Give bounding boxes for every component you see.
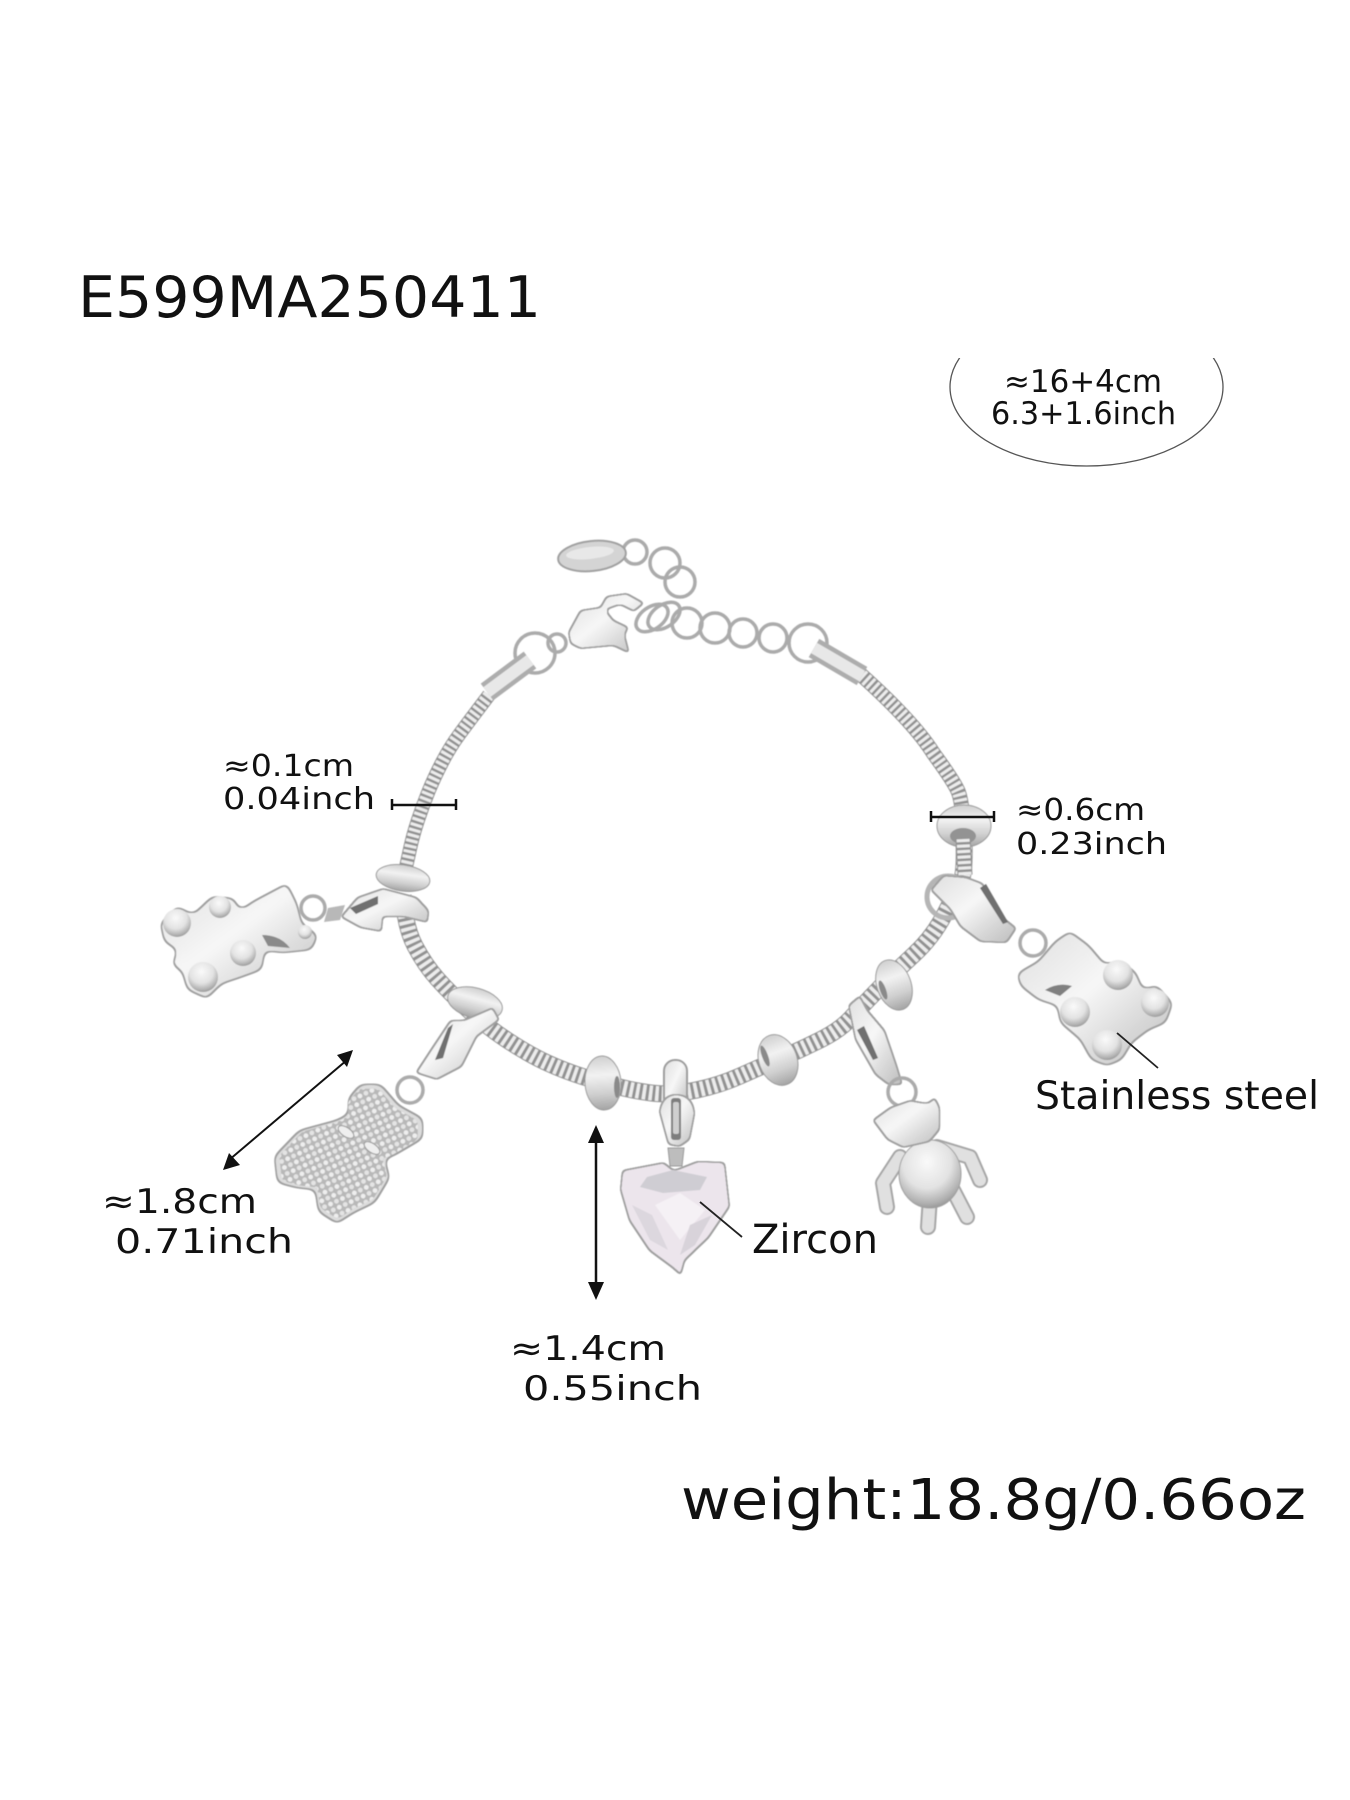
heart size inch: 0.55inch: [523, 1369, 702, 1409]
heart stone: [620, 1161, 730, 1276]
charm: pave zircon bear: [274, 1084, 423, 1224]
charm: left gummy bear: [160, 883, 325, 999]
heart bail: [664, 1060, 687, 1110]
spacer bead: lower right: [869, 955, 919, 1015]
bear size cm: ≈1.8cm: [102, 1182, 257, 1222]
stainless steel leader line: [1117, 1033, 1158, 1068]
teddy torso: [899, 1140, 961, 1208]
extender chain links: [515, 540, 827, 673]
bear charm size measure: [102, 1050, 353, 1262]
title: product code: E599MA250411: [78, 265, 541, 331]
bead width cm: ≈0.6cm: [1016, 793, 1145, 828]
chain thickness inch: 0.04inch: [223, 782, 375, 817]
weight text: weight:18.8g/0.66oz: [681, 1468, 1306, 1533]
bear size inch: 0.71inch: [115, 1222, 293, 1262]
clasp of left gummy bear: [324, 888, 429, 932]
chain thickness bar: [392, 799, 456, 810]
zircon leader line: [700, 1202, 742, 1237]
teddy head: [872, 1097, 940, 1148]
bracelet length callout: [949, 358, 1224, 467]
heart size cm: ≈1.4cm: [510, 1329, 666, 1369]
end tubes of the chain: [487, 648, 862, 692]
bear jump ring: [301, 896, 325, 920]
bead width measure: [931, 793, 1167, 862]
length in inches: 6.3+1.6inch: [991, 396, 1176, 432]
charm: zircon heart: [620, 1060, 730, 1276]
length in cm: ≈16+4cm: [1004, 364, 1162, 400]
spacer bead: bottom centre: [583, 1055, 623, 1111]
diagonal double arrow: [223, 1050, 353, 1170]
chain thickness measure: [223, 749, 456, 817]
bead width inch: 0.23inch: [1016, 827, 1167, 862]
spacer bead: upper right: [937, 805, 991, 875]
heart clasp: [659, 1094, 695, 1147]
teddy clasp: [848, 995, 903, 1085]
length arc: [949, 358, 1224, 467]
chain thickness cm: ≈0.1cm: [223, 749, 354, 784]
clasp of right gummy bear: [927, 875, 1046, 956]
charm: right gummy bear: [1017, 931, 1173, 1066]
teddy limbs fill: [883, 1147, 980, 1227]
teddy ring: [888, 1078, 916, 1106]
teddy limbs outline: [883, 1147, 980, 1227]
clasp of pave bear: [397, 1007, 500, 1103]
charm: standing teddy bear: [848, 995, 980, 1227]
heart charm size measure: [510, 1125, 702, 1409]
bead width bar: [931, 811, 994, 822]
spacer bead: upper left: [374, 861, 432, 895]
bracelet photo: [160, 538, 1173, 1276]
spacer bead: bottom right: [751, 1029, 805, 1091]
zircon label: Zircon: [752, 1217, 878, 1263]
spacer bead: middle left: [444, 981, 506, 1025]
stainless steel label: Stainless steel: [1035, 1074, 1319, 1119]
bear body: [160, 883, 318, 999]
vertical double arrow: [588, 1125, 604, 1300]
lobster clasp: [568, 593, 645, 654]
snake chain: [403, 672, 964, 1094]
extender tag: [557, 538, 627, 574]
